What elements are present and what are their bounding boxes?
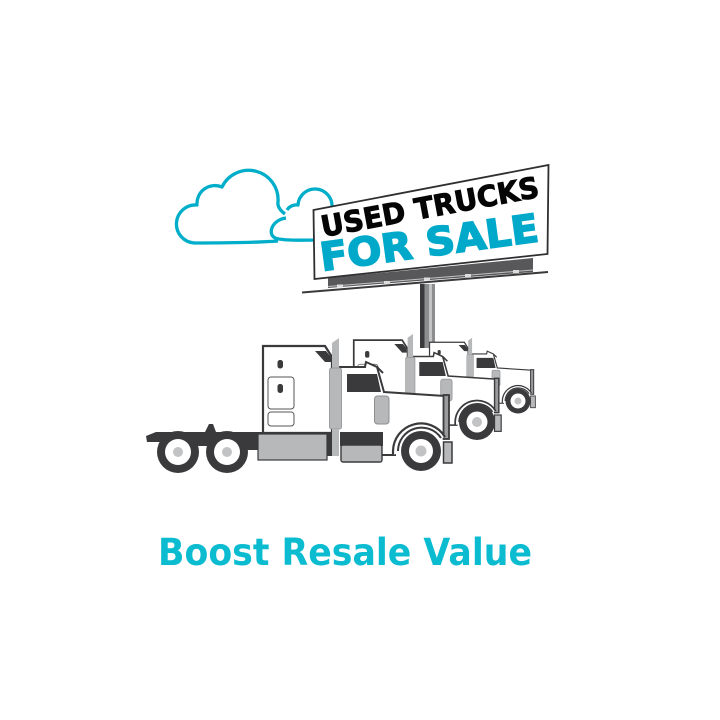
billboard pole [420, 284, 435, 348]
rear truck [430, 338, 535, 414]
billboard text: for sale: FOR SALE [317, 206, 541, 281]
billboard text: used trucks: USED TRUCKS [318, 170, 542, 244]
billboard [302, 165, 548, 348]
billboard panel [314, 165, 548, 279]
truck chassis and rear wheels [146, 424, 332, 473]
truck cab [263, 338, 452, 471]
title: Boost Resale Value [158, 531, 532, 574]
front truck [146, 338, 452, 473]
billboard support band [302, 258, 548, 292]
middle truck [354, 334, 501, 440]
icon: cloud outlines [176, 170, 332, 243]
